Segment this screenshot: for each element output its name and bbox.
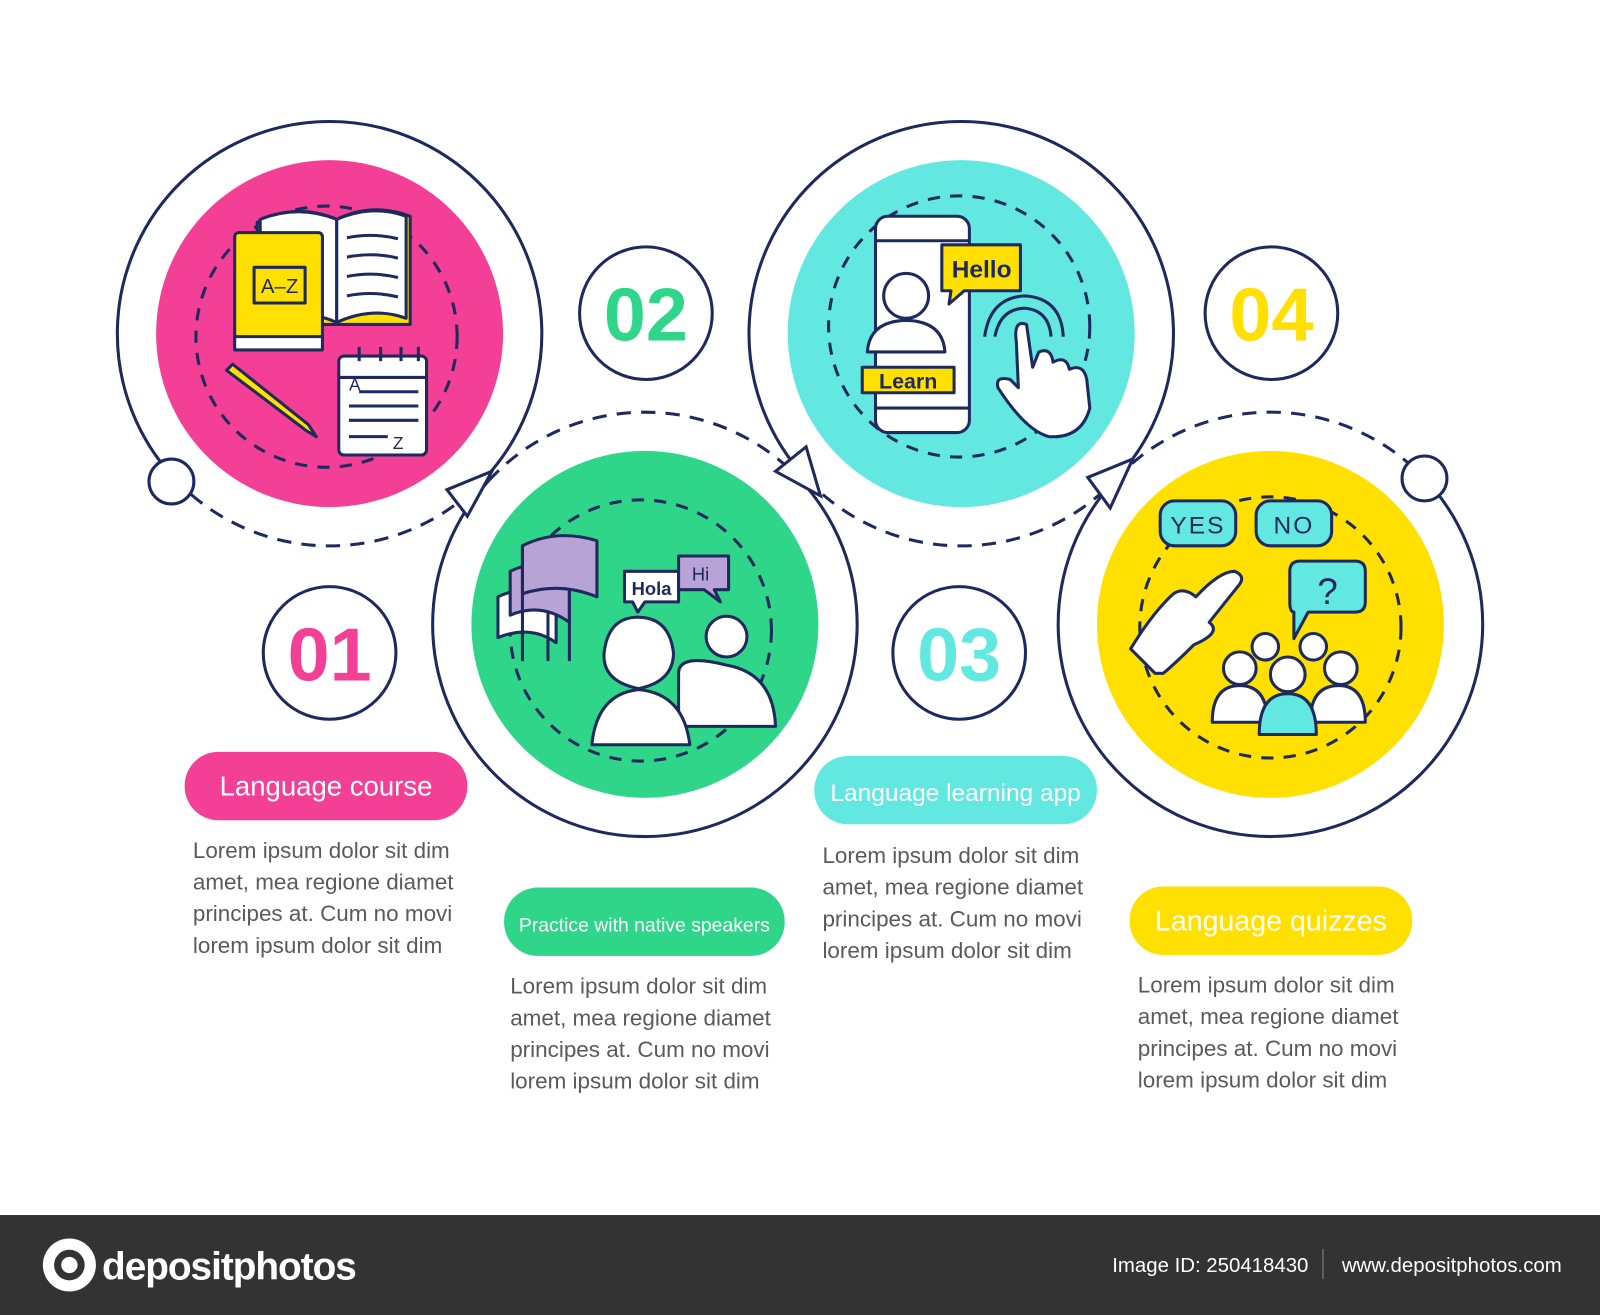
- text block 3: amet, mea regione diamet: [822, 875, 1084, 900]
- panel: learning app icon: Hello: [952, 256, 1012, 283]
- footer bar: [0, 1215, 1600, 1315]
- label: language quizzes: Language quizzes: [1155, 905, 1387, 937]
- footer bar: Image ID: 250418430: [1112, 1255, 1308, 1277]
- number 01: 01: [288, 612, 372, 696]
- text block 4: principes at. Cum no movi: [1138, 1036, 1397, 1061]
- circle 4 outline: [1058, 412, 1483, 837]
- arrow 3: [1088, 459, 1133, 508]
- label: language quizzes: [1130, 887, 1412, 955]
- text block 2: [510, 974, 772, 1094]
- text block 1: principes at. Cum no movi: [193, 901, 452, 926]
- arrow 2: [776, 447, 820, 496]
- number 04: 04: [1229, 273, 1313, 357]
- panel: learning app icon: [788, 160, 1135, 507]
- arrow 1: [447, 471, 492, 516]
- text block 3: lorem ipsum dolor sit dim: [822, 938, 1072, 963]
- panel: language course icon: A: [349, 375, 361, 395]
- panel: learning app icon: Learn: [879, 370, 937, 394]
- text block 2: principes at. Cum no movi: [510, 1037, 770, 1062]
- panel: language course icon: A–Z: [261, 276, 298, 298]
- number 02: [580, 247, 712, 380]
- panel: native speakers icon: Hi: [692, 563, 709, 584]
- number 02: 02: [604, 273, 688, 357]
- number 03: [893, 587, 1026, 719]
- start node: [149, 459, 194, 504]
- panel: language course icon: [156, 160, 503, 507]
- panel: quizzes icon: [1097, 451, 1444, 798]
- text block 4: [1138, 973, 1399, 1093]
- text block 3: principes at. Cum no movi: [822, 906, 1082, 931]
- label: language learning app: [814, 756, 1097, 824]
- text block 1: lorem ipsum dolor sit dim: [193, 933, 442, 958]
- panel: quizzes icon: YES: [1170, 513, 1226, 540]
- number 03: 03: [917, 612, 1001, 696]
- footer bar: depositphotos: [102, 1245, 356, 1288]
- panel: quizzes icon: ?: [1317, 571, 1338, 612]
- label: language learning app: Language learning app: [830, 780, 1081, 807]
- text block 3: [822, 843, 1084, 963]
- text block 3: Lorem ipsum dolor sit dim: [822, 843, 1079, 868]
- circle 1 outline: [117, 121, 542, 546]
- text block 4: lorem ipsum dolor sit dim: [1138, 1068, 1387, 1093]
- label: practice with native speakers: Practice with native speakers: [519, 914, 770, 936]
- text block 2: Lorem ipsum dolor sit dim: [510, 974, 767, 999]
- panel: native speakers icon: Hola: [632, 578, 672, 599]
- text block 2: lorem ipsum dolor sit dim: [510, 1069, 760, 1094]
- label: language course: Language course: [220, 771, 432, 802]
- label: language course: [185, 752, 467, 820]
- text block 4: amet, mea regione diamet: [1138, 1004, 1399, 1029]
- panel: language course icon: Z: [393, 433, 404, 453]
- text block 2: amet, mea regione diamet: [510, 1005, 772, 1030]
- number 04: [1205, 247, 1338, 380]
- text block 4: Lorem ipsum dolor sit dim: [1138, 973, 1395, 998]
- end node: [1402, 456, 1447, 501]
- footer bar: www.depositphotos.com: [1341, 1255, 1562, 1277]
- text block 1: [193, 838, 454, 958]
- panel: native speakers icon: [471, 451, 818, 798]
- number 01: [263, 587, 396, 719]
- text block 1: amet, mea regione diamet: [193, 870, 454, 895]
- panel: quizzes icon: NO: [1273, 513, 1314, 540]
- circle 3 outline: [749, 121, 1173, 546]
- text block 1: Lorem ipsum dolor sit dim: [193, 838, 450, 863]
- circle 2 outline: [433, 412, 857, 837]
- label: practice with native speakers: [504, 888, 785, 956]
